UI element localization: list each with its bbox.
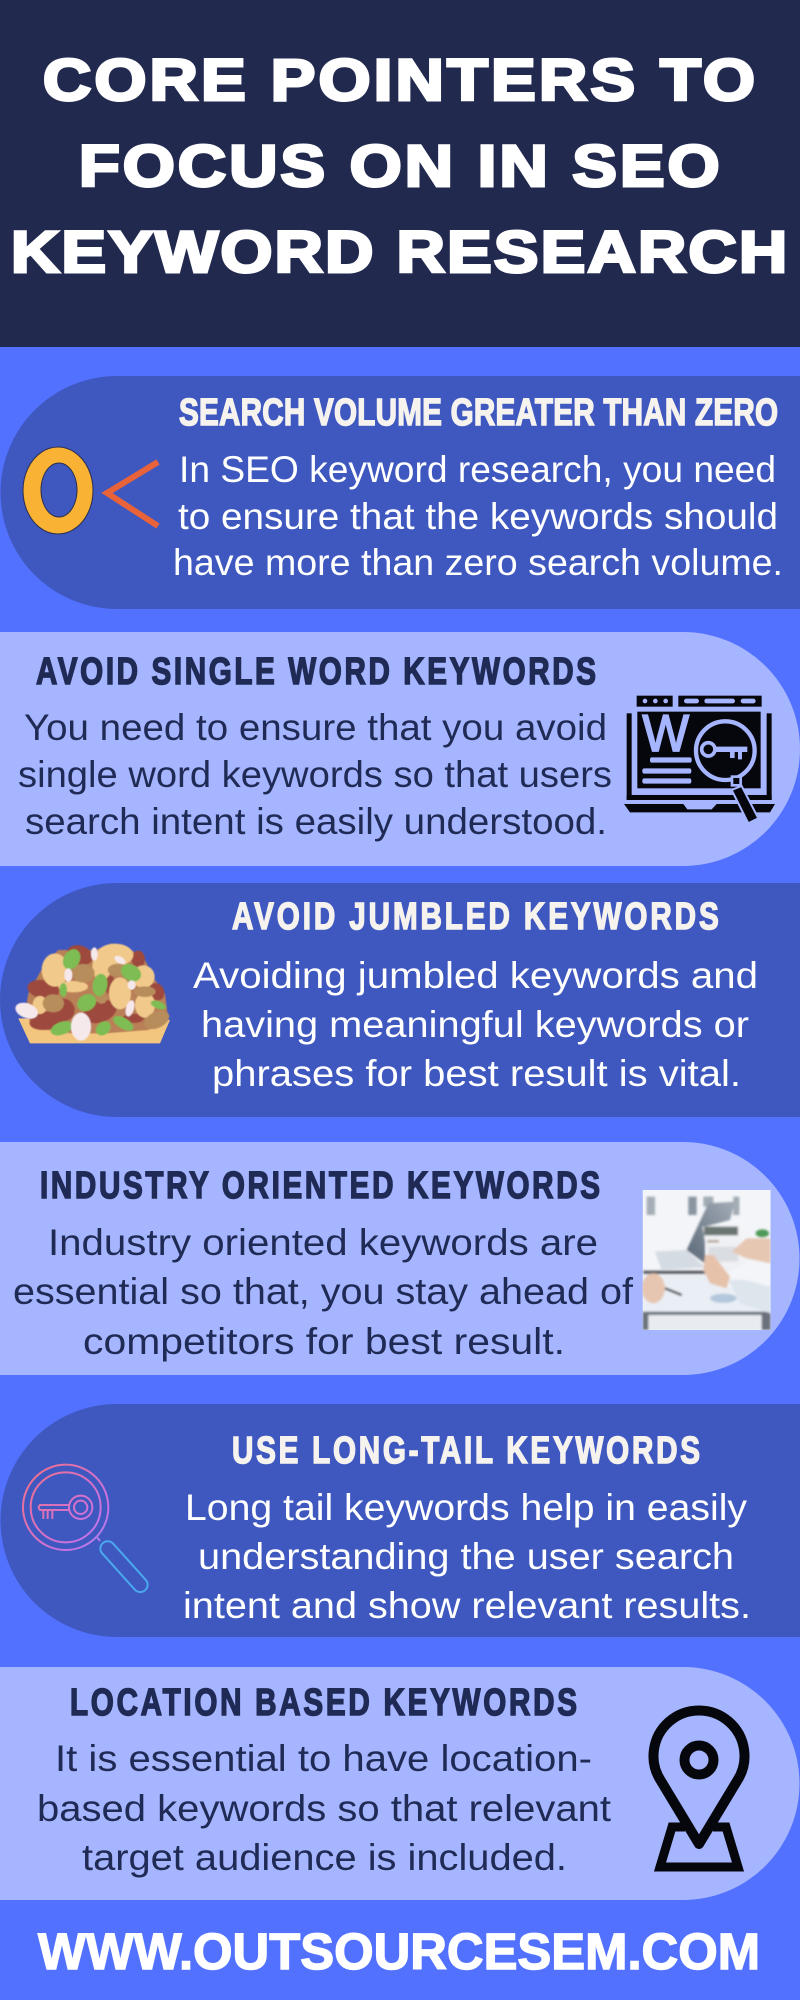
icon: laptop with key magnifier xyxy=(624,696,775,823)
panel: search volume greater than zero xyxy=(1,376,800,609)
panel: avoid jumbled keywords xyxy=(0,883,800,1117)
body text: understanding the user search xyxy=(198,1536,734,1577)
body text: intent and show relevant results. xyxy=(183,1585,751,1626)
body text: competitors for best result. xyxy=(83,1321,565,1362)
body text xyxy=(173,449,783,583)
body text: It is essential to have location- xyxy=(55,1738,592,1779)
icon: gradient magnifier with key xyxy=(23,1465,151,1595)
body text xyxy=(18,707,612,842)
title: KEYWORD RESEARCH xyxy=(11,220,787,285)
body text: based keywords so that relevant xyxy=(37,1788,612,1829)
body text: target audience is included. xyxy=(82,1837,567,1878)
title xyxy=(11,48,787,285)
icon: bowl of mixed nuts xyxy=(13,942,172,1043)
panel: use long-tail keywords xyxy=(1,1404,800,1637)
body text: single word keywords so that users xyxy=(18,754,612,795)
body text xyxy=(13,1222,634,1362)
heading: avoid single word keywords: AVOID SINGLE WORD KEYWORDS xyxy=(36,651,596,693)
icon: location pin on map xyxy=(654,1710,744,1867)
body text: search intent is easily understood. xyxy=(25,801,607,842)
body text: to ensure that the keywords should xyxy=(178,496,778,537)
heading: industry oriented keywords: INDUSTRY ORIENTED KEYWORDS xyxy=(40,1165,600,1207)
body text: Long tail keywords help in easily xyxy=(185,1487,748,1528)
body text xyxy=(37,1738,612,1878)
panel: avoid single word keywords xyxy=(0,632,800,866)
body text: having meaningful keywords or xyxy=(201,1004,749,1045)
body text: have more than zero search volume. xyxy=(173,542,783,583)
body text: essential so that, you stay ahead of xyxy=(13,1271,634,1312)
panel: industry oriented keywords xyxy=(0,1142,800,1375)
heading: avoid jumbled keywords: AVOID JUMBLED KEYWORDS xyxy=(232,896,719,938)
image: hands with calculator and laptop at desk xyxy=(642,1190,771,1330)
heading: use long-tail keywords: USE LONG-TAIL KEYWORDS xyxy=(232,1430,700,1472)
heading: location based keywords: LOCATION BASED KEYWORDS xyxy=(70,1682,577,1724)
footer url: WWW.OUTSOURCESEM.COM xyxy=(38,1923,760,1980)
body text xyxy=(193,955,758,1094)
body text: phrases for best result is vital. xyxy=(212,1053,741,1094)
heading: search volume greater than zero: SEARCH VOLUME GREATER THAN ZERO xyxy=(179,392,778,434)
body text: In SEO keyword research, you need xyxy=(179,449,776,490)
body text: You need to ensure that you avoid xyxy=(24,707,607,748)
icon: zero less-than symbol xyxy=(23,447,158,534)
panel: location based keywords xyxy=(0,1667,800,1900)
body text xyxy=(183,1487,751,1626)
icon: laptop with key magnifier: W xyxy=(642,704,689,762)
body text: Avoiding jumbled keywords and xyxy=(193,955,758,996)
title: CORE POINTERS TO xyxy=(43,48,755,113)
header band xyxy=(0,0,800,347)
body text: Industry oriented keywords are xyxy=(48,1222,598,1263)
title: FOCUS ON IN SEO xyxy=(79,134,720,199)
